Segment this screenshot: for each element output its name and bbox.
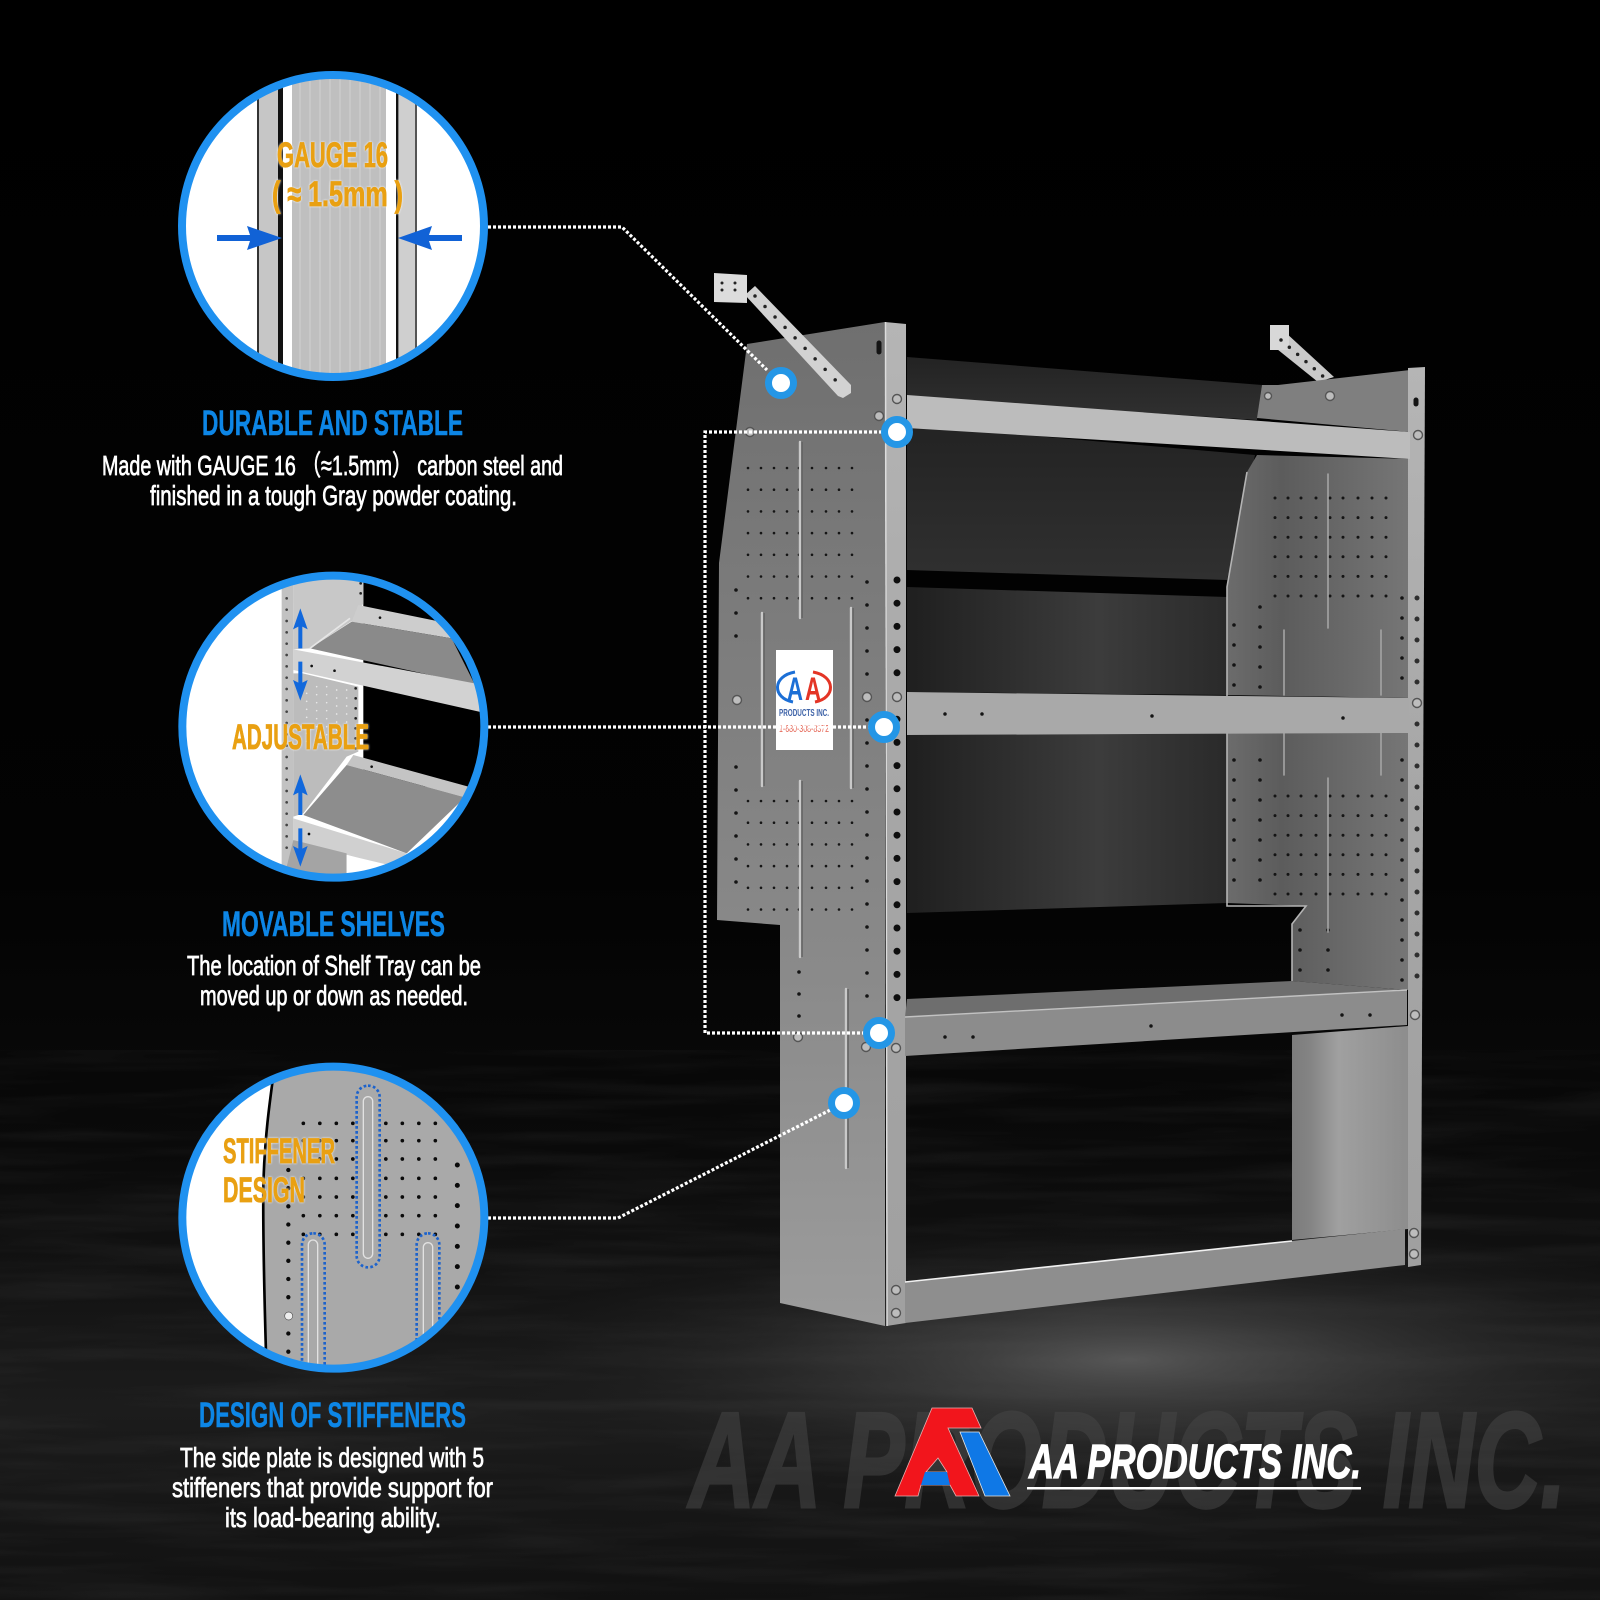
adjustable label: ADJUSTABLE xyxy=(232,718,369,757)
dotted stiffener outlines xyxy=(302,1086,439,1390)
stiffener label: STIFFENER xyxy=(223,1132,335,1171)
back panels xyxy=(907,357,1262,913)
left side panel with stiffeners xyxy=(717,322,885,1326)
text block: movable shelves: moved up or down as needed. xyxy=(200,980,468,1011)
heading: durable and stable: DURABLE AND STABLE xyxy=(202,404,463,443)
stiffener slots xyxy=(308,1097,433,1383)
shelf 2: middle crossbar xyxy=(907,692,1409,735)
text block: durable and stable xyxy=(102,450,563,511)
text block: design of stiffeners: The side plate is designed with 5 xyxy=(180,1442,484,1473)
right mounting bracket xyxy=(1270,325,1334,382)
product: steel van shelving unit xyxy=(714,273,1425,1326)
left mounting bracket xyxy=(714,273,851,398)
shelf 3: lower tray and crossbar xyxy=(905,981,1407,1056)
text block: design of stiffeners xyxy=(172,1442,493,1533)
gauge label: GAUGE 16 xyxy=(277,136,388,175)
text block: design of stiffeners: stiffeners that provide support for xyxy=(172,1472,493,1503)
leader line: movable shelves callout xyxy=(488,725,884,729)
stiffener label xyxy=(223,1132,335,1210)
label plate on side panel: A xyxy=(787,671,803,707)
text block: durable and stable: finished in a tough Gray powder coating. xyxy=(150,480,517,511)
label plate on side panel: 1-680-308-8372 xyxy=(779,724,829,735)
panel: gauge detail circle xyxy=(182,60,484,400)
hotspot markers xyxy=(768,370,910,1116)
adjustment arrows xyxy=(293,608,308,867)
brand name: AA PRODUCTS INC. xyxy=(1028,1436,1361,1489)
gauge label xyxy=(272,136,403,214)
left and right uprights xyxy=(879,322,1425,1326)
right side panel, upper xyxy=(1227,370,1410,990)
label plate on side panel xyxy=(776,650,833,750)
icon: brand A mark xyxy=(895,1408,1010,1496)
bottom crossbar xyxy=(905,1229,1405,1323)
right lower panel xyxy=(1292,1026,1408,1240)
leader line: gauge callout to shelf xyxy=(488,227,767,370)
panel: stiffener detail circle xyxy=(182,1063,490,1390)
label plate on side panel: A xyxy=(805,671,821,707)
logo: AA Products Inc. xyxy=(895,1408,1361,1496)
text block: movable shelves: The location of Shelf Tray can be xyxy=(187,950,481,981)
text block: durable and stable: Made with GAUGE 16 （≈1.5mm） carbon steel and xyxy=(102,450,563,481)
panel: adjustable shelves circle xyxy=(182,573,497,883)
gauge thickness arrows xyxy=(217,226,462,250)
label plate on side panel: PRODUCTS INC. xyxy=(779,708,829,719)
bolts xyxy=(732,392,1422,1318)
leader line: stiffener callout xyxy=(488,1103,844,1218)
leader line: adjustable shelf bracket xyxy=(705,432,897,1033)
text block: design of stiffeners: its load-bearing ability. xyxy=(225,1502,441,1533)
shelf 1: top crossbar xyxy=(907,395,1410,459)
stiffener label: DESIGN xyxy=(223,1171,305,1210)
gauge label: ( ≈ 1.5mm ) xyxy=(272,175,403,214)
heading: design of stiffeners: DESIGN OF STIFFENERS xyxy=(199,1396,466,1435)
text block: movable shelves xyxy=(187,950,481,1011)
heading: movable shelves: MOVABLE SHELVES xyxy=(222,905,445,944)
